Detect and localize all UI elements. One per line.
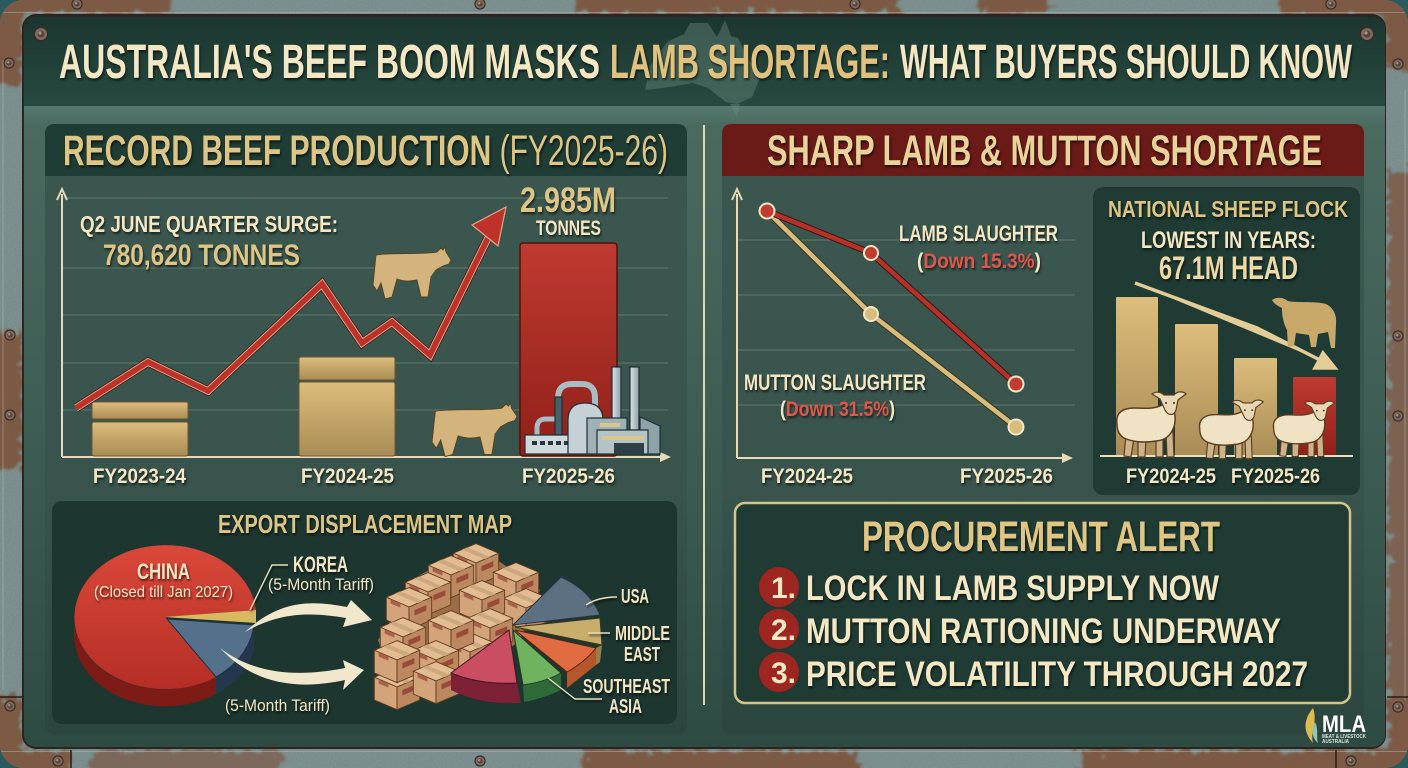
- axis labels: FY2024-25: [1126, 465, 1216, 488]
- axis labels: [93, 465, 615, 488]
- heading: sheep flock: 67.1M HEAD: [1159, 250, 1298, 286]
- panel: record beef production: [45, 124, 687, 735]
- logo: MLA: MEAT & LIVESTOCK: [1322, 734, 1366, 740]
- label: Southeast Asia: ASIA: [609, 696, 642, 718]
- callout: total tonnes: TONNES: [536, 217, 601, 240]
- callout: total tonnes: [520, 181, 616, 240]
- chart: beef production bars and trend: [57, 181, 671, 488]
- heading: procurement alert: PROCUREMENT ALERT: [862, 513, 1220, 561]
- axis labels: FY2025-26: [960, 465, 1053, 488]
- label: lamb slaughter: [899, 221, 1058, 273]
- chart: slaughter decline lines: [732, 189, 1075, 488]
- icon: sheep two: [1200, 400, 1263, 459]
- axis labels: FY2023-24: [93, 465, 186, 488]
- pie: displaced destinations: [451, 577, 602, 703]
- axis labels: [761, 465, 1053, 488]
- panel: lamb and mutton shortage: [722, 124, 1364, 735]
- label: lamb slaughter: LAMB SLAUGHTER: [899, 221, 1058, 246]
- label: China: (Closed till Jan 2027): [94, 584, 233, 601]
- heading: sheep flock: LOWEST IN YEARS:: [1141, 227, 1316, 254]
- label: Southeast Asia: SOUTHEAST: [583, 676, 670, 698]
- callout: Q2 surge: [80, 211, 338, 272]
- label: Southeast Asia: [548, 676, 670, 718]
- arrow: lower displacement: [220, 648, 364, 690]
- label: mutton slaughter: MUTTON SLAUGHTER: [744, 370, 926, 395]
- item 3: PRICE VOLATILITY THROUGH 2027: [806, 655, 1308, 694]
- label: Korea: (5-Month Tariff): [268, 575, 374, 594]
- axis labels: FY2024-25: [761, 465, 853, 488]
- arrow: flock decline: [1135, 283, 1335, 368]
- callout: total tonnes: 2.985M: [520, 181, 616, 220]
- label: Middle East: [588, 623, 670, 666]
- icon: sheep three: [1273, 401, 1334, 457]
- label: Korea: KOREA: [293, 552, 348, 577]
- label: China: CHINA: [137, 559, 190, 584]
- label: Middle East: EAST: [624, 644, 660, 666]
- icon: faint Australia map: [645, 20, 760, 117]
- label: lower tariff: (5-Month Tariff): [225, 696, 330, 715]
- bar: FY2023-24: [92, 402, 188, 456]
- logo: MLA: AUSTRALIA: [1322, 739, 1349, 745]
- panel: export displacement map: [52, 501, 677, 724]
- axis labels: FY2025-26: [1231, 465, 1320, 488]
- bar: FY2024-25: [299, 357, 395, 456]
- title: [59, 36, 1352, 89]
- icon: gold sheep: [1272, 298, 1336, 348]
- logo: MLA: MLA: [1322, 711, 1366, 738]
- label: USA: USA: [621, 586, 649, 608]
- line: mutton slaughter: [767, 211, 1024, 434]
- bar chart: flock size: [1100, 297, 1353, 456]
- label: mutton slaughter: (Down 31.5%): [780, 398, 895, 421]
- callout: Q2 surge: 780,620 TONNES: [103, 239, 300, 272]
- axis labels: FY2024-25: [301, 465, 394, 488]
- line: lamb slaughter: [760, 204, 1024, 392]
- axis labels: FY2025-26: [522, 465, 615, 488]
- label: mutton slaughter: [744, 370, 926, 421]
- heading: sheep flock: NATIONAL SHEEP FLOCK: [1108, 196, 1348, 222]
- heading: sheep flock: [1108, 196, 1348, 286]
- icon: lower cow: [432, 403, 517, 457]
- item 2: 2.: [771, 614, 796, 647]
- item 1: LOCK IN LAMB SUPPLY NOW: [806, 569, 1219, 608]
- label: lamb slaughter: (Down 15.3%): [917, 250, 1041, 273]
- heading: export displacement map: EXPORT DISPLACEMENT MAP: [218, 509, 512, 539]
- item 1: 1.: [771, 572, 796, 605]
- bar: FY2025-26: [520, 243, 617, 456]
- heading: record beef production: RECORD BEEF PRODUCTION (FY2025-26): [63, 127, 668, 175]
- label: Middle East: MIDDLE: [615, 623, 670, 645]
- title: LAMB SHORTAGE:: [610, 36, 890, 89]
- item 3: 3.: [771, 657, 796, 690]
- icon: stacked cartons: [374, 544, 549, 710]
- label: USA: [586, 586, 649, 608]
- logo: MLA: [1306, 708, 1366, 745]
- label: Korea: [250, 552, 374, 610]
- callout: Q2 surge: Q2 JUNE QUARTER SURGE:: [80, 211, 338, 237]
- title: AUSTRALIA'S BEEF BOOM MASKS: [59, 36, 600, 89]
- pie: China share: [74, 545, 256, 706]
- icon: sheep one: [1117, 392, 1186, 457]
- icon: factory: [525, 367, 660, 454]
- title band: [24, 17, 1385, 117]
- axis labels: [1126, 465, 1320, 488]
- label: China: [94, 559, 233, 601]
- arrow: upper displacement: [245, 600, 372, 632]
- panel: national sheep flock: [1093, 187, 1360, 495]
- item 2: MUTTON RATIONING UNDERWAY: [806, 612, 1281, 651]
- panel: procurement alert: [735, 503, 1350, 703]
- trend arrow: [76, 207, 506, 408]
- icon: upper cow: [373, 247, 451, 299]
